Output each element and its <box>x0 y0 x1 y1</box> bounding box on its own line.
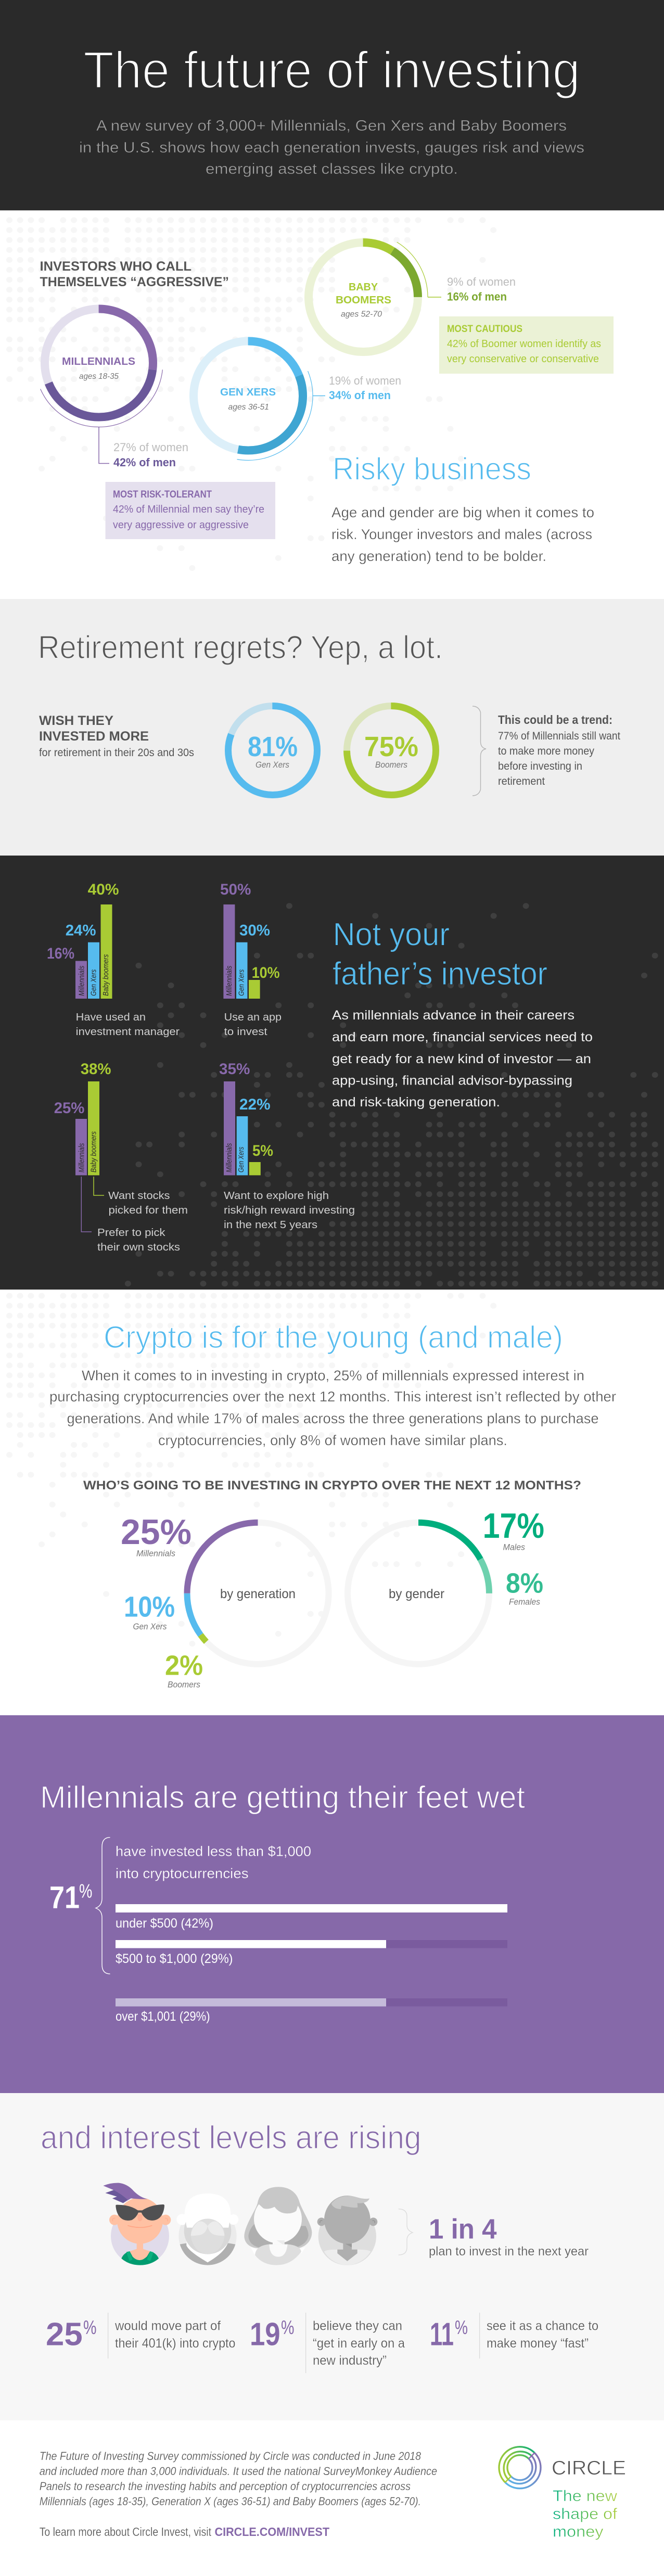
heading: not your father's investor <box>333 917 547 992</box>
chart: high risk investing: in the next 5 years <box>224 1219 317 1231</box>
heading: not your father's investor: Not your <box>333 917 450 953</box>
text: this could be a trend: This could be a trend: <box>498 713 612 726</box>
text: have invested less than $1,000: into cryptocurrencies <box>116 1866 249 1881</box>
boomer stats: 9% of women <box>447 275 516 288</box>
donut: millennials: ages 18-35 <box>79 372 119 381</box>
panel: header <box>0 0 664 211</box>
callout: most risk-tolerant: very aggressive or aggressive <box>113 519 249 531</box>
tagline: the new shape of money: The new <box>553 2488 617 2505</box>
stat: 25% would move part of 401(k): 25 <box>46 2317 83 2353</box>
stat: 71%: 71 <box>49 1880 80 1915</box>
stat: 11% make money fast: 11 <box>430 2317 454 2353</box>
chart: have used an investment manager: Millennials <box>77 965 86 996</box>
chart: use an app to invest: Millennials <box>225 965 234 996</box>
chart: have used an investment manager: 40% <box>88 881 119 898</box>
chart: stock picking: their own stocks <box>97 1242 180 1253</box>
body text: risky business: risk. Younger investors and males (across <box>331 526 592 542</box>
intro text: in the U.S. shows how each generation invests, gauges risk and views <box>79 139 584 156</box>
text: wish they invested more <box>39 713 194 759</box>
brace <box>399 2209 413 2255</box>
chart: high risk investing: Gen Xers <box>237 1146 246 1172</box>
callout: most cautious: MOST CAUTIOUS <box>447 324 522 335</box>
callout: most risk-tolerant <box>106 482 275 539</box>
donut: baby boomers: BABY <box>349 282 378 293</box>
chart: use an app to invest: 10% <box>252 964 280 981</box>
chart: high risk investing: risk/high reward investing <box>224 1205 355 1216</box>
donut: baby boomers: ages 52-70 <box>341 310 382 319</box>
donut: 81% gen xers: Gen Xers <box>256 760 289 770</box>
panel: interest levels are rising <box>0 2093 664 2420</box>
text: wish they invested more: INVESTED MORE <box>39 729 149 744</box>
icon: grey man <box>317 2196 377 2265</box>
heading: risky business: Risky business <box>333 452 531 486</box>
chart: use an app to invest: 30% <box>239 922 270 939</box>
methodology text: Panels to research the investing habits and perception of cryptocurrencies across <box>40 2480 411 2493</box>
heading: investors who call themselves aggressive: INVESTORS WHO CALL <box>40 259 191 274</box>
title: The future of investing <box>83 41 580 99</box>
tagline: the new shape of money: shape of <box>553 2506 618 2523</box>
intro text: emerging asset classes like crypto. <box>206 161 458 177</box>
link text: CIRCLE.COM/INVEST <box>214 2525 329 2539</box>
chart: have used an investment manager: Gen Xers <box>90 969 98 996</box>
donut: baby boomers <box>299 233 441 362</box>
chart: have used an investment manager: Baby boomers <box>101 954 110 996</box>
stat: 10% gen xers: 10% <box>124 1590 175 1623</box>
donut: gen xers: ages 36-51 <box>228 403 269 412</box>
stat: 17% males: 17% <box>483 1506 544 1546</box>
donut: 75% boomers: 75% <box>364 731 418 762</box>
donut: gen xers <box>184 331 325 460</box>
stat: 19% get in early: % <box>281 2317 295 2338</box>
methodology text: The Future of Investing Survey commissioned by Circle was conducted in June 2018 <box>40 2450 422 2463</box>
callout: most cautious <box>439 316 614 374</box>
bar: $500 to $1,000: $500 to $1,000 (29%) <box>116 1952 233 1966</box>
body text: risky business: any generation) tend to be bolder. <box>331 548 546 564</box>
logo: circle rings <box>499 2447 541 2489</box>
body text: not your father's investor: As millennials advance in their careers <box>332 1008 574 1023</box>
chart: high risk investing: 5% <box>252 1142 273 1159</box>
chart: have used an investment manager: 24% <box>66 922 96 939</box>
brace <box>473 706 486 796</box>
chart: stock picking: Millennials <box>78 1143 86 1172</box>
chart: have used an investment manager: 16% <box>47 945 74 962</box>
text: this could be a trend <box>498 713 620 787</box>
link text <box>40 2525 329 2539</box>
tagline: the new shape of money <box>553 2488 618 2541</box>
gen xer stats <box>329 374 401 402</box>
chart: stock picking: 38% <box>81 1061 111 1078</box>
chart: stock picking: 25% <box>54 1100 84 1117</box>
text: this could be a trend: before investing in <box>498 760 582 772</box>
panel: risky business <box>0 211 664 599</box>
millennial stats <box>113 441 188 469</box>
stat: 25% would move part of 401(k) <box>46 2313 235 2358</box>
icon: grey woman <box>244 2187 312 2265</box>
donut: 75% boomers <box>347 706 436 795</box>
methodology text: and included more than 3,000 individuals. It used the national SurveyMonkey Audience <box>40 2465 437 2478</box>
chart: use an app to invest <box>220 881 282 1038</box>
intro text <box>79 118 584 177</box>
stat: 2% boomers: 2% <box>165 1650 203 1681</box>
text: this could be a trend: retirement <box>498 775 545 787</box>
text: this could be a trend: 77% of Millennials still want <box>498 730 620 742</box>
chart: stock picking: Prefer to pick <box>97 1227 166 1239</box>
body text: crypto: When it comes to in investing in crypto, 25% of millennials expressed interest in <box>82 1368 584 1384</box>
stat: 71%: % <box>79 1881 92 1902</box>
donut: 81% gen xers <box>228 706 317 795</box>
panel: not your father's investor <box>0 856 664 1290</box>
brace <box>96 1838 110 1974</box>
chart: stock picking: Want stocks <box>108 1190 170 1202</box>
body text: crypto: purchasing cryptocurrencies over the next 12 months. This interest isn’t reflected by other <box>49 1388 616 1405</box>
stat: 1 in 4: plan to invest in the next year <box>429 2245 589 2259</box>
methodology text: Millennials (ages 18-35), Generation X (ages 36-51) and Baby Boomers (ages 52-70). <box>40 2495 421 2508</box>
body text: risky business <box>331 504 594 564</box>
text: this could be a trend: to make more money <box>498 745 594 757</box>
stat: 25% millennials: Millennials <box>136 1549 175 1558</box>
body text: not your father's investor: get ready for a new kind of investor — an <box>332 1052 591 1066</box>
donut: baby boomers: BOOMERS <box>336 295 391 306</box>
body text: not your father's investor: app-using, financial advisor-bypassing <box>332 1073 572 1088</box>
stat: 11% make money fast: make money “fast” <box>487 2336 589 2351</box>
text: wish they invested more: WISH THEY <box>39 713 113 728</box>
body text: crypto <box>49 1368 616 1448</box>
stat: 19% get in early: new industry” <box>313 2353 387 2368</box>
text: have invested less than $1,000 <box>116 1844 311 1881</box>
boomer stats: 16% of men <box>447 290 507 303</box>
donut: by gender <box>348 1523 489 1664</box>
stat: 1 in 4: 1 in 4 <box>429 2214 496 2245</box>
panel: crypto is for the young <box>0 1290 664 1715</box>
callout: most cautious: very conservative or conservative <box>447 353 599 365</box>
chart: use an app to invest: to invest <box>224 1026 267 1038</box>
heading: crypto: Crypto is for the young (and male) <box>104 1320 563 1355</box>
stat: 11% make money fast: see it as a chance to <box>487 2319 598 2333</box>
millennial stats: 27% of women <box>113 441 188 454</box>
stat: 8% females: Females <box>509 1597 540 1607</box>
chart: use an app to invest: Use an app <box>224 1012 282 1023</box>
donut: by gender: by gender <box>389 1587 444 1601</box>
donut: millennials: MILLENNIALS <box>62 356 135 367</box>
stat: 8% females: 8% <box>506 1567 543 1599</box>
logo: CIRCLE wordmark: CIRCLE <box>552 2457 626 2479</box>
body text: crypto: cryptocurrencies, only 8% of women have similar plans. <box>158 1432 507 1448</box>
chart: use an app to invest: Gen Xers <box>237 969 246 996</box>
chart: stock picking: Baby boomers <box>90 1131 98 1172</box>
stat: 17% males: Males <box>503 1542 525 1552</box>
stat: 10% gen xers: Gen Xers <box>133 1622 167 1631</box>
callout: most cautious: 42% of Boomer women identify as <box>447 338 601 350</box>
heading: not your father's investor: father’s investor <box>333 956 547 992</box>
heading: investors who call themselves aggressive <box>40 259 229 289</box>
stat: 25% would move part of 401(k): would move part of <box>114 2319 221 2333</box>
text: wish they invested more: for retirement in their 20s and 30s <box>39 747 194 759</box>
boomer stats <box>447 275 516 303</box>
donut: by generation: by generation <box>220 1587 296 1601</box>
donut: gen xers: GEN XERS <box>220 387 276 398</box>
heading: investors who call themselves aggressive: THEMSELVES “AGGRESSIVE” <box>40 275 229 289</box>
body text: crypto: generations. And while 17% of males across the three generations plans to purchase <box>67 1410 598 1426</box>
intro text: A new survey of 3,000+ Millennials, Gen Xers and Baby Boomers <box>96 118 567 134</box>
bar: over $1,001 <box>116 1998 507 2024</box>
body text: not your father's investor <box>332 1008 593 1110</box>
chart: high risk investing: 35% <box>219 1061 250 1078</box>
icon: millennial with sunglasses <box>103 2183 171 2265</box>
bar: under $500 <box>116 1904 507 1931</box>
donut: millennials <box>35 299 163 463</box>
bar: $500 to $1,000 <box>116 1940 507 1966</box>
body text: risky business: Age and gender are big when it comes to <box>331 504 594 520</box>
panel: millennials are getting their feet wet <box>0 1715 664 2093</box>
donut: by generation <box>187 1523 329 1664</box>
stat: 19% get in early: “get in early on a <box>313 2336 405 2351</box>
gen xer stats: 19% of women <box>329 374 401 387</box>
link text: To learn more about Circle Invest, visit <box>40 2525 212 2539</box>
chart: stock picking: picked for them <box>108 1205 188 1216</box>
heading: millennials feet wet: Millennials are getting their feet wet <box>40 1780 525 1815</box>
chart: high risk investing: Want to explore high <box>224 1190 329 1202</box>
stat: 19% get in early: 19 <box>250 2317 280 2353</box>
stat: 25% would move part of 401(k): % <box>83 2317 97 2338</box>
heading: interest levels: and interest levels are rising <box>41 2120 422 2156</box>
chart: high risk investing <box>219 1061 355 1231</box>
chart: have used an investment manager: Have used an <box>76 1012 146 1023</box>
heading: retirement regrets: Retirement regrets? Yep, a lot. <box>38 630 443 666</box>
chart: high risk investing: 22% <box>239 1096 271 1113</box>
stat: 25% would move part of 401(k): their 401(k) into crypto <box>115 2336 235 2351</box>
stat: 25% millennials: 25% <box>121 1512 191 1552</box>
chart: stock picking <box>54 1061 188 1253</box>
icon: grey old man <box>176 2194 238 2265</box>
stat: 11% make money fast <box>430 2313 598 2358</box>
panel: retirement regrets <box>0 599 664 856</box>
callout: most risk-tolerant: MOST RISK-TOLERANT <box>113 489 212 500</box>
body text: not your father's investor: and earn more, financial services need to <box>332 1030 593 1044</box>
gen xer stats: 34% of men <box>329 389 391 402</box>
chart: use an app to invest: 50% <box>220 881 251 898</box>
panel: footer <box>0 2420 664 2576</box>
stat: 1 in 4 <box>429 2214 589 2259</box>
chart: have used an investment manager <box>47 881 180 1038</box>
stat: 19% get in early: believe they can <box>313 2319 402 2333</box>
chart: have used an investment manager: investment manager <box>76 1026 180 1038</box>
donut: 81% gen xers: 81% <box>248 731 298 762</box>
stat: 2% boomers: Boomers <box>168 1680 200 1689</box>
stat: 19% get in early <box>250 2313 405 2373</box>
methodology text <box>40 2450 437 2508</box>
stat: 11% make money fast: % <box>455 2317 468 2338</box>
body text: not your father's investor: and risk-taking generation. <box>332 1095 500 1110</box>
text: have invested less than $1,000: have invested less than $1,000 <box>116 1844 311 1859</box>
bar: under $500: under $500 (42%) <box>116 1916 213 1931</box>
millennial stats: 42% of men <box>113 456 176 469</box>
heading: who's going to be investing: WHO’S GOING TO BE INVESTING IN CRYPTO OVER THE NEXT 12 MONTHS? <box>83 1478 581 1493</box>
chart: high risk investing: Millennials <box>225 1143 234 1172</box>
tagline: the new shape of money: money <box>553 2523 604 2541</box>
bar: over $1,001: over $1,001 (29%) <box>116 2009 210 2024</box>
donut: 75% boomers: Boomers <box>375 760 407 770</box>
callout: most risk-tolerant: 42% of Millennial men say they’re <box>113 504 264 515</box>
